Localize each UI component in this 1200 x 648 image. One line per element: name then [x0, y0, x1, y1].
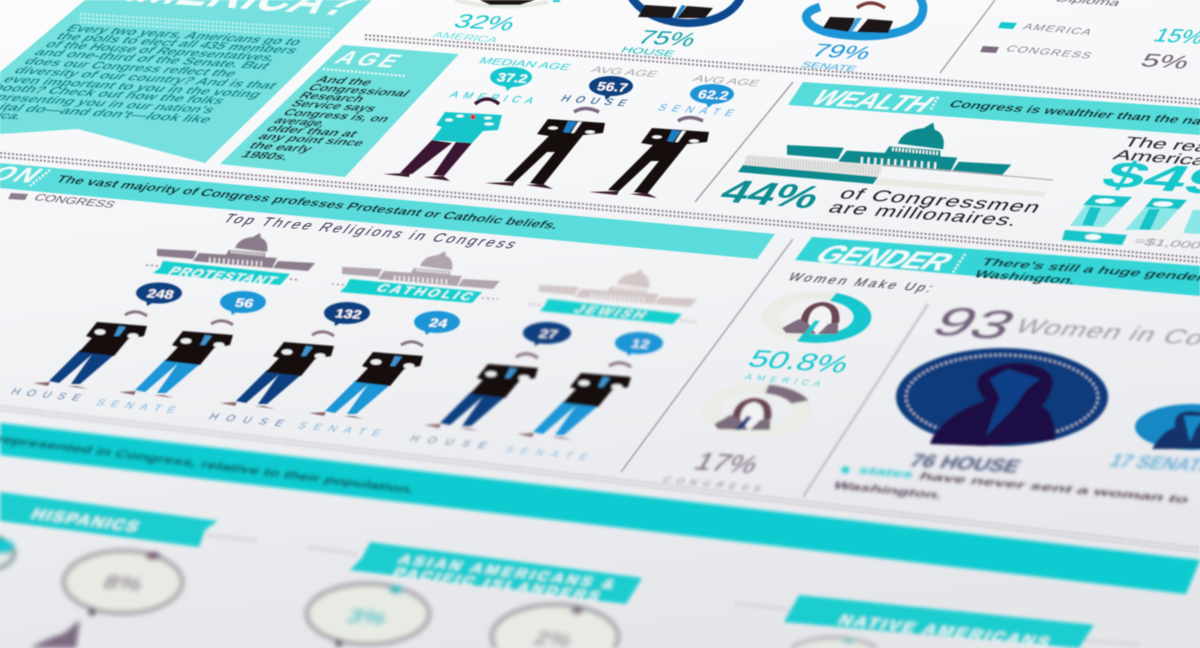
religion: Jewish: 27: [537, 327, 560, 341]
age figure: America: [383, 56, 573, 181]
dotted rule: middle: [0, 153, 1200, 262]
donut: women in America 50.8 percent: AMERICA: [743, 372, 824, 388]
gauge: Asian Americans 3 percent: 3%: [343, 604, 392, 629]
wealth caption: are millionaires.: [825, 198, 1024, 229]
age paragraph: And the: [313, 74, 376, 88]
bubble: 56.7: [589, 76, 633, 100]
age paragraph: Congress is, on: [280, 107, 393, 124]
age paragraph: average,: [271, 115, 330, 129]
donut: women in Congress 17 percent: CONGRESS: [660, 475, 764, 494]
note: states without a woman in Washington: Washington.: [830, 479, 946, 501]
age figure: House: AVG AGE: [588, 65, 660, 80]
note: states without a woman in Washington: states: [855, 464, 918, 480]
religion: Catholic: [206, 251, 500, 439]
legend: one thousand dollars: =$1,000: [1131, 236, 1200, 251]
gauge: Pacific Islanders 2 percent: [492, 605, 618, 648]
religion: Jewish: HOUSE: [407, 434, 496, 452]
panel: education legend and percentages: 5%: [1137, 50, 1194, 73]
icon: figure under Hispanics gauge: [30, 620, 80, 648]
donut: women in America 50.8 percent: 50.8%: [743, 346, 855, 379]
divider: religion and gender: [621, 239, 793, 472]
ribbon: Native Americans: [784, 595, 1094, 648]
ribbon: Asian Americans and Pacific Islanders: PACIFIC ISLANDERS: [390, 566, 604, 604]
stat: 93 women in Congress: 93: [922, 300, 1026, 348]
religion: Protestant: 248: [145, 287, 176, 301]
wealth caption: [825, 184, 1046, 229]
age paragraph: older than at: [263, 123, 361, 139]
donut: women in Congress 17 percent: 17%: [689, 448, 764, 479]
wealth statement: Congress is wealthier than the nation: [946, 98, 1200, 129]
religion: Protestant: PROTESTANT: [164, 265, 281, 288]
stat labels: 76 House and 17 Senate: [906, 451, 1200, 477]
religion: Jewish: SENATE: [502, 445, 597, 463]
label: women make up: Women Make Up:: [785, 270, 937, 295]
bubble: 62.2: [690, 84, 734, 108]
religion: Catholic: SENATE: [295, 421, 390, 439]
age paragraph: Congressional: [305, 82, 413, 99]
bubble: 56.7: 56.7: [595, 79, 630, 95]
icon: dollar bill: [1062, 230, 1127, 245]
top row: 75 percent House: HOUSE: [618, 46, 677, 59]
legend: congress: [8, 193, 118, 210]
top row: 75 percent House: 75%: [633, 27, 701, 51]
wealth stat: 49 thousand: America: [1110, 147, 1200, 169]
age paragraph: any point since: [255, 131, 368, 148]
intro paragraph: diversity of our country? And is that: [11, 64, 282, 91]
religion statement: The vast majority of Congress professes Protestant or Catholic beliefs.: [53, 173, 563, 231]
age paragraph: [238, 74, 413, 162]
age figure: Senate: SENATE: [655, 103, 744, 119]
divider: women share and 93 women: [803, 304, 928, 497]
divider: age and wealth: [695, 82, 793, 202]
representation statement: represented in Congress, relative to their population.: [0, 433, 418, 496]
gauge: partial left circle: [0, 533, 14, 573]
intro paragraph: the polls to elect all 435 members: [53, 30, 302, 56]
age figure: America: AMERICA: [447, 90, 544, 107]
religion: Catholic: CATHOLIC: [372, 282, 478, 303]
age paragraph: Service says: [288, 98, 380, 114]
gauge: Hispanics 8 percent: 8%: [99, 570, 148, 595]
ribbon: [153, 261, 290, 285]
panel: gender band: [795, 237, 1200, 296]
ribbon: Hispanics: HISPANICS: [28, 506, 144, 535]
icon: 17 Senate women circle: [1135, 404, 1200, 450]
note: states without a woman in Washington: [830, 464, 1192, 506]
ribbon: Hispanics: [0, 492, 218, 547]
age figure: Senate: [589, 74, 762, 198]
gauge: Native Americans: [791, 638, 877, 648]
dotted rules: ribbon connectors: [207, 535, 1140, 645]
intro paragraph: Every two years, Americans go to: [63, 22, 306, 48]
heading: wealth: WEALTH: [803, 85, 945, 117]
divider: upper right: [940, 0, 995, 73]
top row: 79 percent Senate: 79%: [808, 40, 876, 63]
donut: women in Congress 17 percent: [660, 388, 803, 494]
panel: religion band: [0, 155, 775, 259]
dotted rule: top: [365, 35, 1200, 104]
top row: 32 percent America: [430, 0, 560, 45]
intro paragraph: even important to you in the voting: [0, 73, 266, 100]
top row: 75 percent House: [618, 0, 746, 59]
religion: Catholic: 24: [427, 316, 450, 330]
religion: Protestant: HOUSE: [8, 387, 90, 404]
icon: 76 House women circle: [896, 348, 1108, 446]
religion: Jewish: JEWISH: [570, 303, 651, 322]
bubble: 37.2: 37.2: [495, 70, 530, 86]
religion: Protestant: [8, 233, 315, 416]
religion: Protestant: 56: [233, 296, 256, 310]
bubble: 62.2: 62.2: [696, 87, 731, 103]
age paragraph: the early: [246, 140, 316, 154]
ribbon: [540, 299, 682, 324]
heading: age: AGE: [328, 48, 411, 72]
icon: money stacks: [1070, 195, 1200, 234]
religion: Jewish: 12: [629, 337, 652, 351]
heading: gender: GENDER: [807, 240, 965, 276]
top row: 79 percent Senate: SENATE: [798, 61, 859, 74]
age paragraph: Research: [296, 90, 368, 105]
icon: teal capitol: [787, 123, 1011, 176]
age figure: Senate: AVG AGE: [690, 74, 762, 89]
gender statement: There's still a huge gender gap in: [978, 256, 1200, 287]
religion: Catholic: HOUSE: [206, 412, 293, 429]
bubble: 37.2: [490, 67, 532, 91]
panel: age text: [220, 45, 459, 177]
intro paragraph: [0, 22, 306, 125]
stat labels: 76 House and 17 Senate: 76 HOUSE: [906, 451, 1024, 477]
wealth stat: 49 thousand: [1093, 134, 1200, 204]
millionaire bar: [738, 155, 1053, 197]
panel: education legend and percentages: AMERICA: [1020, 22, 1095, 38]
age figure: House: [485, 65, 660, 189]
ribbon: Asian Americans and Pacific Islanders: ASIAN AMERICANS &: [395, 553, 619, 592]
legend: congress: CONGRESS: [31, 193, 118, 210]
note: states without a woman in Washington: have never sent a woman to: [916, 470, 1192, 506]
wealth stat: 44 percent: 44%: [712, 174, 829, 216]
intro paragraph: does our Congress reflect the: [21, 55, 241, 79]
gauge: Asian Americans 3 percent: [307, 584, 429, 647]
top row: 79 percent Senate: [798, 0, 923, 74]
donut: women in America 50.8 percent: [743, 295, 863, 388]
dotted rule: lower: [0, 406, 1200, 552]
panel: wealth: [712, 82, 1200, 234]
age paragraph: 1980s.: [238, 149, 293, 162]
intro dotted rule: [80, 14, 333, 37]
wealth caption: of Congressmen: [836, 184, 1046, 216]
age figure: House: HOUSE: [558, 94, 637, 109]
gauge: Hispanics 8 percent: [64, 551, 182, 616]
ribbon: [340, 279, 482, 303]
age figure: America: MEDIAN AGE: [476, 56, 573, 73]
panel: representation band: [0, 423, 1200, 594]
panel: education legend and percentages: [980, 0, 1200, 73]
religion: Catholic: 132: [333, 307, 364, 321]
intro paragraph: of the House of Representatives,: [42, 38, 281, 63]
panel: does Congress look like America intro: [0, 0, 382, 163]
panel: gender band: Washington.: [971, 268, 1080, 287]
religion: Protestant: SENATE: [93, 398, 185, 416]
chart title: top three religions: Top Three Religions in Congress: [219, 212, 522, 252]
top row: 32 percent America: AMERICA: [430, 31, 500, 45]
stat: 93 women in Congress: [922, 300, 1200, 356]
religion: Jewish: [407, 269, 697, 463]
ribbon: Asian Americans and Pacific Islanders: [350, 542, 642, 604]
panel: education legend and percentages: CONGRESS: [1003, 44, 1095, 61]
top row: 32 percent America: 32%: [449, 11, 520, 35]
wealth stat: 49 thousand: The real: [1120, 134, 1200, 156]
intro paragraph: and one-third of the Senate. But: [31, 46, 275, 72]
